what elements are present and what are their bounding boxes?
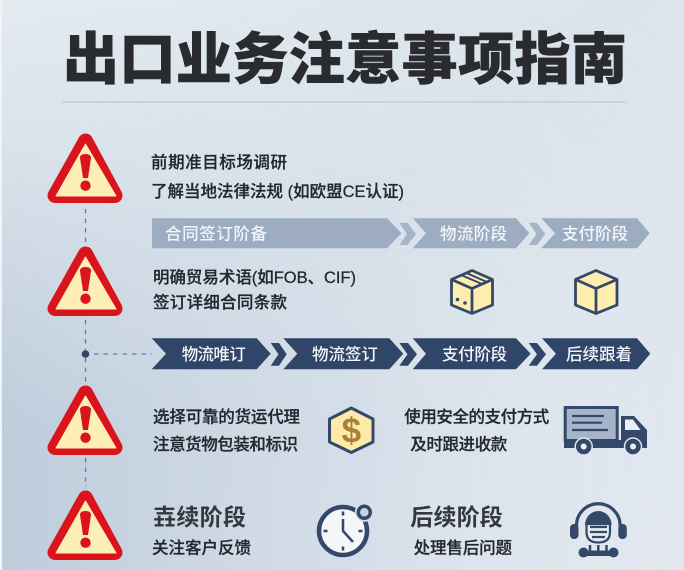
stage banner row: light: 物流阶段 — [440, 224, 507, 244]
text block: after-sales stage: 后续阶段 — [410, 504, 503, 530]
text block: market research: 了解当地法律法规 (如欧盟CE认证) — [151, 182, 404, 201]
stage banner row: light: 支付阶段 — [562, 224, 628, 244]
text block: after-sales stage: 处理售后问题 — [414, 538, 512, 558]
icon: warning triangle 3 — [55, 393, 116, 448]
text block: follow-up stage: 关注客户反馈 — [152, 538, 251, 558]
stage banner row: dark: 物流签订 — [312, 345, 378, 364]
stage banner row: light — [152, 218, 650, 248]
icon: dollar hexagon: $ — [342, 412, 361, 450]
stage banner row: light: 合同签订阶备 — [165, 224, 268, 244]
timeline connector — [82, 209, 152, 487]
text block: trade terms: 签订详细合同条款 — [153, 293, 288, 312]
text block: market research: 前期准目标场调研 — [151, 153, 287, 172]
icon: headset — [570, 504, 627, 558]
stage banner row: dark: 后续跟着 — [566, 345, 632, 364]
title: 出口业务注意事项指南 — [63, 28, 627, 91]
text block: freight forwarder — [153, 408, 300, 454]
icon: plain box — [576, 270, 617, 314]
icon: dollar hexagon — [330, 408, 373, 452]
stage banner row: dark: 支付阶段 — [442, 345, 507, 364]
text block: trade terms: 明确贸易术语(如FOB、CIF) — [153, 268, 356, 287]
stage banner row: dark: 物流唯订 — [182, 345, 246, 364]
icon: clock — [319, 503, 374, 555]
text block: freight forwarder: 选择可靠的货运代理 — [153, 408, 300, 426]
icon: warning triangle 4 — [55, 498, 116, 553]
text block: market research — [151, 153, 404, 201]
text block: after-sales stage — [410, 504, 512, 558]
icon: warning triangle 2 — [55, 254, 116, 309]
background — [0, 0, 342, 570]
icon: truck — [564, 408, 647, 455]
text block: freight forwarder: 注意货物包装和标识 — [153, 435, 298, 454]
icon: parcel box — [452, 270, 492, 314]
text block: safe payment: 及时跟进收款 — [410, 435, 508, 454]
text block: follow-up stage — [152, 504, 251, 558]
icon: warning triangle 1 — [55, 141, 116, 196]
text block: safe payment: 使用安全的支付方式 — [404, 406, 550, 426]
title rule — [62, 101, 626, 103]
stage banner row: dark — [152, 338, 650, 369]
text block: safe payment — [404, 406, 550, 454]
text block: follow-up stage: 壵续阶段 — [153, 504, 246, 530]
text block: trade terms — [153, 268, 356, 312]
